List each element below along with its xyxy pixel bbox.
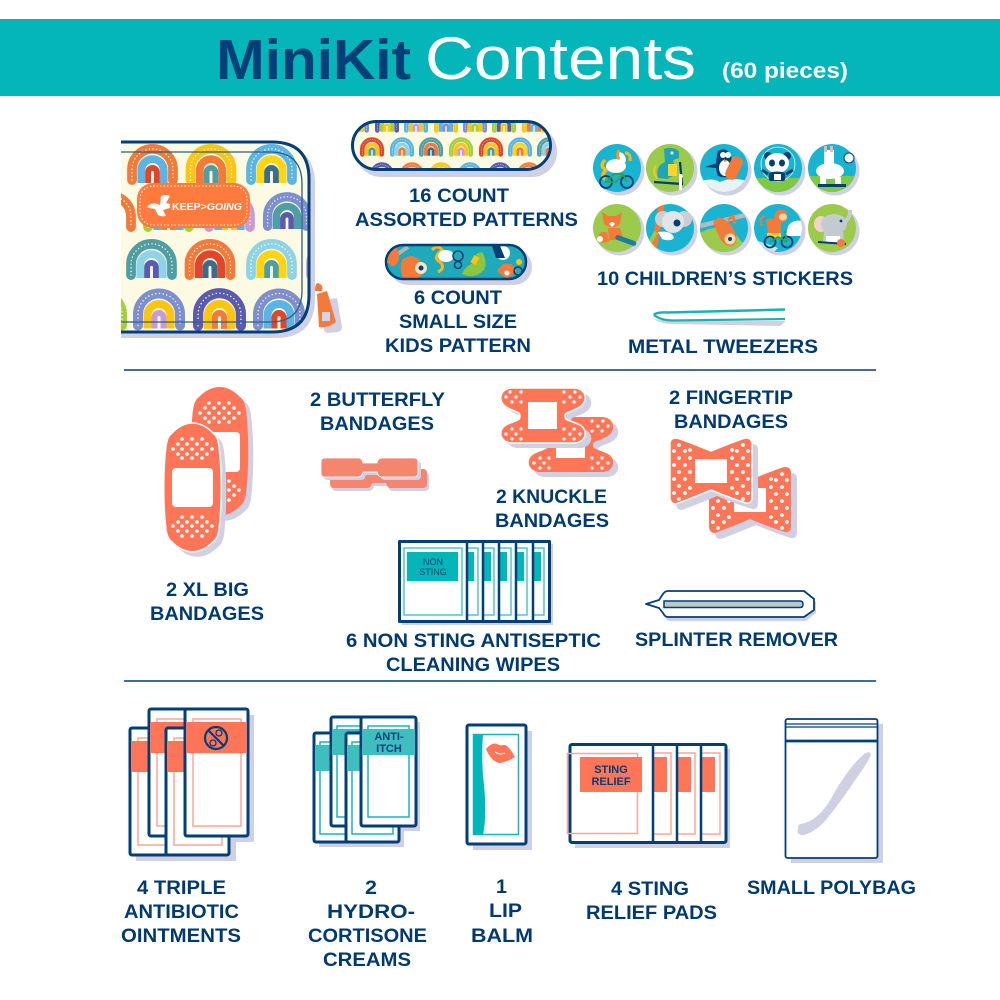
sticker: panda jumping rope [752,144,806,196]
label: 10 children's stickers: 10 CHILDREN’S STICKERS [597,268,853,290]
sting relief pads [568,744,730,848]
hydrocortisone creams: ANTI- [374,731,404,743]
XL big bandages [164,387,253,557]
hydrocortisone creams [314,717,420,847]
title: Contents: Contents [425,25,696,92]
label: 4 sting relief pads [586,878,717,924]
label: 1 lip balm: 1 [496,876,507,898]
label: 1 lip balm: BALM [471,925,533,947]
label: 6 non sting antiseptic cleaning wipes: CLEANING WIPES [386,654,560,676]
label: small polybag: SMALL POLYBAG [747,877,916,899]
label: splinter remover: SPLINTER REMOVER [635,629,838,651]
label: 4 sting relief pads: 4 STING [611,878,689,900]
antiseptic wipes: STING [419,567,447,577]
sticker: elephant [808,204,860,256]
sticker: dinosaur on scooter [646,144,698,196]
icon: no germs [205,727,227,749]
antiseptic wipes [400,541,553,625]
label: 2 XL big bandages [150,579,264,625]
label: 2 XL big bandages: 2 XL BIG [166,579,249,601]
label: 6 non sting antiseptic cleaning wipes: 6 NON STING ANTISEPTIC [346,630,601,652]
sticker: llama playing soccer [806,144,860,196]
piece count: (60 pieces) [722,58,848,83]
label: 2 fingertip bandages: 2 FINGERTIP [669,387,793,409]
label: 16 count assorted patterns: 16 COUNT [409,185,509,207]
label: 2 hydrocortisone creams [308,877,427,971]
butterfly bandages [321,458,429,491]
label: 16 count assorted patterns [355,185,578,231]
label: 4 triple antibiotic ointments [121,877,241,947]
adhesive bandage: assorted rainbow pattern [351,120,557,177]
pouch tag: Keep Going: KEEP>GOING [172,202,242,213]
label: 2 fingertip bandages [669,387,793,433]
label: 4 triple antibiotic ointments: ANTIBIOTIC [124,901,239,923]
label: 4 triple antibiotic ointments: 4 TRIPLE [137,877,226,899]
sticker: penguin on snowboard [698,144,752,196]
knuckle bandages [501,388,618,477]
small polybag [785,719,883,863]
label: 2 XL big bandages: BANDAGES [150,603,264,625]
label: 2 hydrocortisone creams: CORTISONE [308,925,427,947]
fingertip bandages [670,438,797,539]
label: 6 count small size kids pattern: SMALL SIZE [399,311,517,333]
icon: lips [486,744,515,763]
pouch tag: Keep Going [137,183,250,228]
label: 2 hydrocortisone creams: HYDRO- [327,901,415,923]
label: 2 knuckle bandages: BANDAGES [495,510,609,532]
lip balm [467,725,532,850]
sticker: unicorn on bike [593,144,644,196]
label: metal tweezers: METAL TWEEZERS [628,336,818,358]
title: MiniKit: MiniKit [216,28,411,92]
sticker: monkey on bike [752,204,806,256]
sticker: fox on skateboard [593,204,644,256]
sting relief pads: RELIEF [591,776,631,788]
icon: splinter remover [646,591,816,621]
hydrocortisone creams: ITCH [376,743,402,755]
sticker: sloth [698,204,752,256]
label: 6 count small size kids pattern: KIDS PATTERN [385,335,531,357]
triple antibiotic ointments [130,709,254,861]
antiseptic wipes: NON [423,557,443,567]
label: 1 lip balm [471,876,533,947]
icon: metal tweezers [653,310,786,326]
label: 6 count small size kids pattern [385,287,531,357]
label: 2 butterfly bandages: 2 BUTTERFLY [310,389,445,411]
label: 2 butterfly bandages: BANDAGES [320,413,434,435]
label: 6 count small size kids pattern: 6 COUNT [414,287,502,309]
label: 2 hydrocortisone creams: CREAMS [323,949,411,971]
sting relief pads: STING [594,764,628,776]
label: 2 knuckle bandages: 2 KNUCKLE [496,486,607,508]
label: 4 sting relief pads: RELIEF PADS [586,902,717,924]
label: 2 butterfly bandages [310,389,445,435]
label: 2 fingertip bandages: BANDAGES [674,411,788,433]
label: 2 hydrocortisone creams: 2 [365,877,377,899]
divider [124,369,876,371]
title banner [0,19,1000,96]
label: 2 knuckle bandages [495,486,609,532]
rainbow pouch [121,140,342,338]
divider [124,680,876,682]
label: 16 count assorted patterns: ASSORTED PATTERNS [355,209,578,231]
label: 4 triple antibiotic ointments: OINTMENTS [121,925,241,947]
sticker: koala [646,202,698,256]
zipper pull [315,283,342,333]
label: 1 lip balm: LIP [489,900,522,922]
label: 6 non sting antiseptic cleaning wipes [346,630,601,676]
adhesive bandage: kids pattern [385,244,532,285]
children's stickers [593,144,860,256]
